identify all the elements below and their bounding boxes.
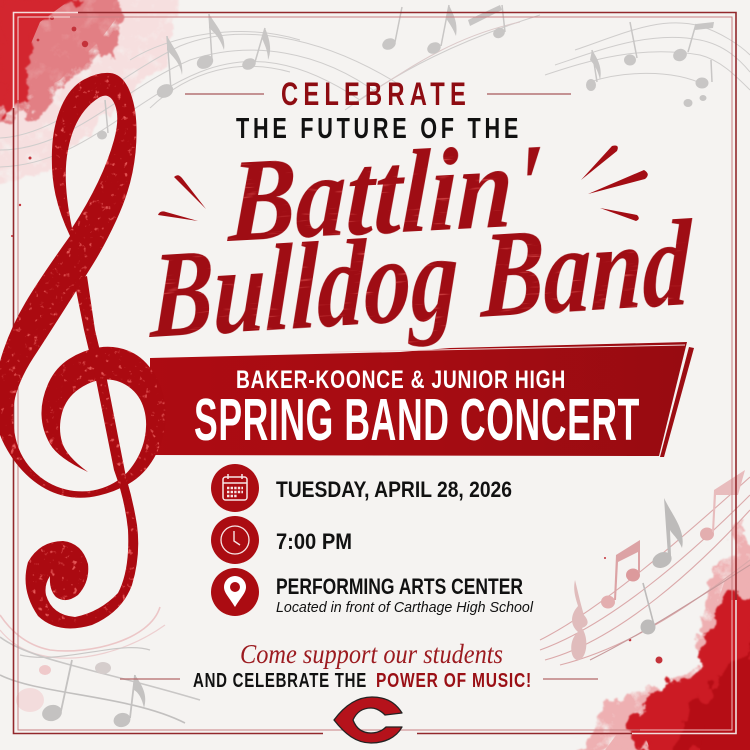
venue text: Located in front of Carthage High School	[276, 600, 534, 616]
burst rays right	[581, 146, 648, 221]
closing line with rules: POWER OF MUSIC!	[376, 670, 532, 692]
closing line with rules	[120, 670, 598, 692]
watercolor splash: bottom right	[575, 520, 750, 750]
burst rays left	[158, 175, 206, 221]
icon: location pin	[211, 568, 259, 616]
date text: TUESDAY, APRIL 28, 2026	[276, 477, 512, 502]
banner	[150, 342, 694, 457]
divider one	[276, 515, 563, 517]
sheet music: bottom right stave	[540, 477, 750, 665]
heading: the future of the: THE FUTURE OF THE	[236, 113, 522, 145]
script tagline: Come support our students	[240, 639, 503, 669]
banner subtitle: BAKER-KOONCE & JUNIOR HIGH	[236, 366, 566, 394]
venue text: PERFORMING ARTS CENTER	[276, 574, 523, 599]
watercolor splash: top left	[0, 0, 185, 190]
divider two	[276, 563, 563, 565]
title line one: Battlin': Battlin'	[225, 120, 543, 267]
icon: calendar	[211, 464, 259, 512]
music notes: top row	[97, 5, 714, 140]
music notes: bottom right	[571, 470, 745, 660]
closing line with rules: AND CELEBRATE THE	[193, 670, 367, 692]
heading: celebrate with side rules: CELEBRATE	[281, 76, 471, 112]
logo: letter C	[334, 697, 402, 743]
icon: clock	[211, 516, 259, 564]
sheet music: bottom left	[0, 607, 200, 729]
paint splatter dots	[11, 16, 662, 704]
venue text	[276, 574, 534, 616]
treble clef	[0, 73, 166, 628]
time text: 7:00 PM	[276, 529, 352, 554]
sheet music: top staves	[0, 15, 750, 167]
